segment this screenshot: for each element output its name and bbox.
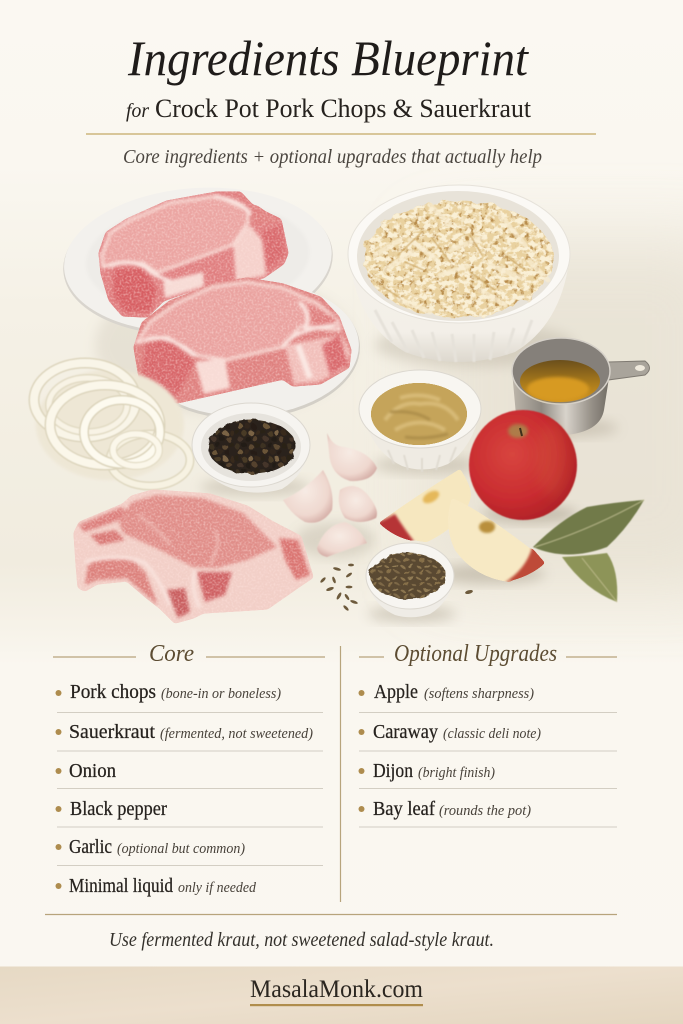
item: caraway [358, 721, 541, 743]
garlic cloves [283, 433, 377, 558]
subtitle: Crock Pot Pork Chops & Sauerkraut [155, 93, 532, 123]
garlic clove left [283, 470, 333, 523]
item: caraway: Caraway [373, 721, 439, 743]
plate shadows [95, 275, 355, 415]
core heading: Core [149, 641, 194, 667]
front pork chop [135, 279, 350, 402]
title: Ingredients Blueprint [127, 30, 529, 86]
item: onion: Onion [69, 760, 116, 782]
bowl [362, 412, 480, 470]
item: sauerkraut: Sauerkraut [69, 721, 155, 743]
bowl [366, 578, 453, 617]
left apple slice [379, 469, 471, 542]
cup rim [512, 338, 610, 404]
back plate [58, 179, 338, 344]
apple slices [379, 469, 545, 584]
bone-in pork chop [75, 491, 312, 622]
brand underline [250, 1004, 423, 1006]
plates with two pork chops [58, 179, 363, 425]
optional upgrades column [358, 641, 617, 827]
title rule [86, 133, 596, 135]
bowl shadow [200, 478, 310, 496]
item: pork chops: (bone-in or boneless) [161, 686, 281, 702]
front plate [133, 276, 363, 425]
upper bay leaf [533, 500, 644, 554]
item: bay leaf [358, 798, 531, 820]
subtitle: for [126, 100, 149, 122]
bowl inner [357, 191, 559, 321]
caraway bowl [366, 543, 456, 622]
apple blush [536, 424, 568, 496]
brand name: MasalaMonk.com [250, 976, 424, 1003]
bowl shadow [368, 606, 456, 622]
footnote: Use fermented kraut, not sweetened salad-style kraut. [109, 929, 494, 951]
item: apple: (softens sharpness) [424, 686, 534, 702]
back pork chop [100, 193, 287, 316]
oil [520, 360, 600, 402]
apple stem hollow [508, 424, 528, 438]
apple shadow [482, 505, 578, 523]
item: garlic [56, 836, 245, 858]
item: garlic: (optional but common) [117, 841, 245, 857]
item: apple: Apple [374, 681, 418, 703]
item: black pepper: Black pepper [70, 798, 167, 820]
black peppercorns [208, 420, 296, 474]
sauerkraut shreds [363, 201, 553, 317]
handle [608, 361, 650, 380]
bowl rim [348, 185, 570, 323]
onion rings [34, 363, 190, 486]
optional upgrades heading: Optional Upgrades [394, 641, 557, 667]
item: minimal liquid: Minimal liquid [69, 875, 173, 897]
whole apple [469, 410, 578, 523]
item: minimal liquid [56, 875, 257, 897]
garlic clove bottom [317, 522, 367, 557]
item: caraway: (classic deli note) [443, 726, 541, 742]
item: sauerkraut: (fermented, not sweetened) [160, 726, 313, 742]
cup body [512, 371, 610, 435]
item: bay leaf: (rounds the pot) [439, 803, 531, 819]
column divider [340, 646, 342, 902]
item: dijon: Dijon [373, 760, 413, 782]
item: pork chops [56, 681, 281, 703]
item: dijon [358, 760, 495, 782]
loose caraway seeds [320, 564, 473, 611]
pepper bowl [192, 403, 310, 496]
item: pork chops: Pork chops [70, 681, 156, 703]
item: minimal liquid: only if needed [178, 880, 257, 896]
bowl ribs [375, 310, 532, 362]
garlic clove right [339, 486, 377, 522]
bay leaves [533, 500, 644, 602]
garlic shadow [295, 522, 375, 558]
garlic clove top [327, 433, 377, 481]
bowl body [350, 262, 569, 362]
mustard bowl [359, 370, 481, 474]
measuring cup with oil [512, 338, 650, 437]
slice shadows [435, 564, 545, 584]
item: apple [358, 681, 534, 703]
core column [53, 641, 325, 897]
bowl [193, 447, 310, 493]
cup shadow [522, 419, 618, 437]
photo surface shading [430, 240, 683, 580]
ingredients photo illustration [34, 179, 650, 622]
caraway seeds [370, 553, 446, 599]
dijon mustard [371, 383, 467, 445]
item: garlic: Garlic [69, 836, 112, 858]
right apple slice [448, 498, 545, 582]
lower bay leaf [562, 553, 617, 602]
bowl shadow [375, 323, 575, 367]
item: sauerkraut [56, 721, 313, 743]
bowl shadow [373, 456, 477, 474]
item: bay leaf: Bay leaf [373, 798, 435, 820]
tagline: Core ingredients + optional upgrades that actually help [123, 146, 542, 168]
sauerkraut bowl [348, 185, 575, 367]
item: dijon: (bright finish) [418, 765, 495, 781]
footer band [0, 966, 683, 1024]
apple body [469, 410, 577, 520]
